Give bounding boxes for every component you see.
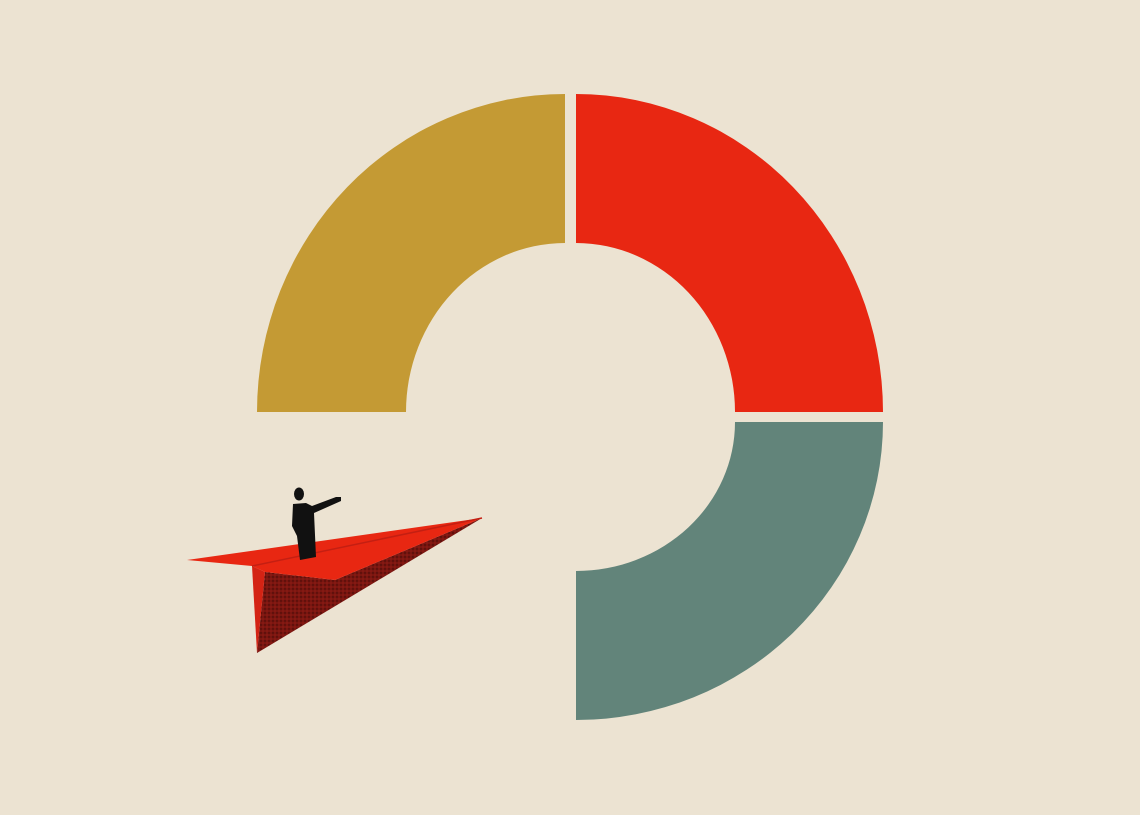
plane: top wing xyxy=(187,518,482,580)
segment: teal bottom-right quarter xyxy=(576,422,883,720)
segment: red top-right quarter xyxy=(576,94,883,412)
paper plane with person xyxy=(187,488,482,653)
person xyxy=(292,488,341,560)
plane: crease xyxy=(252,518,482,566)
plane: dark underside xyxy=(257,518,482,653)
plane: fold xyxy=(252,566,265,653)
segment: mustard top-left quarter xyxy=(257,94,565,412)
